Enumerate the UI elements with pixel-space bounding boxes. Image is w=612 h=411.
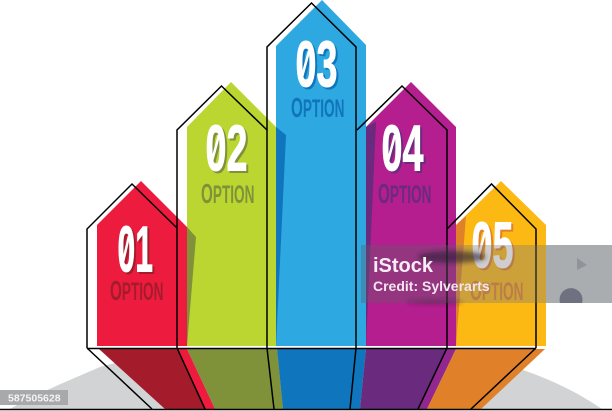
- number 02: 02: [206, 113, 247, 185]
- number 05: 05: [472, 210, 513, 282]
- number 03: 03: [296, 29, 337, 101]
- number 01: 01: [118, 213, 153, 285]
- cast shadows between arrows: [187, 122, 466, 346]
- watermark text: iStock: [373, 255, 434, 277]
- label: option 01: OPTION: [110, 275, 163, 306]
- label: option 05: OPTION: [470, 275, 523, 306]
- panel: option 03 blue arrow: [276, 0, 366, 346]
- panel: option 05 yellow arrow: [456, 181, 546, 346]
- panel: option 02 lime arrow: [187, 82, 276, 346]
- label: option 04: OPTION: [378, 178, 431, 209]
- label: option 03: OPTION: [291, 92, 344, 123]
- grey mound base: [10, 351, 602, 409]
- image id tag: 587505628: [8, 392, 61, 404]
- watermark band: [361, 245, 612, 304]
- label: option 02: OPTION: [201, 178, 254, 209]
- number 04: 04: [382, 113, 424, 185]
- image id tag: [0, 390, 68, 405]
- panel: option 01 red arrow: [97, 181, 187, 346]
- panel: option 04 magenta arrow: [366, 82, 456, 346]
- watermark band: Credit: Sylverarts: [373, 278, 490, 294]
- floor: shaded base segments: [99, 349, 545, 409]
